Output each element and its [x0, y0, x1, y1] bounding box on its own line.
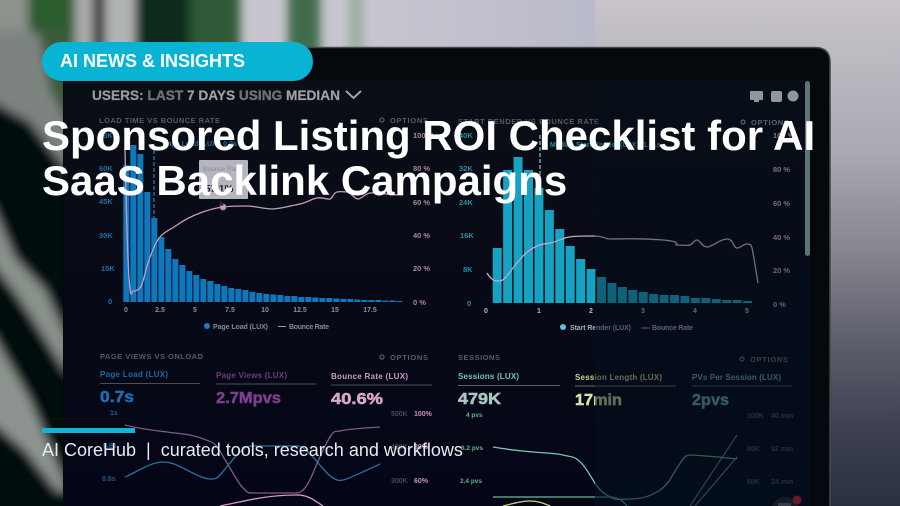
metric: sessions: 479K	[458, 391, 502, 408]
laptop body	[63, 48, 830, 506]
panel: page views vs onload	[100, 352, 433, 506]
line: sessions	[493, 447, 737, 500]
panel: sessions: SESSIONS	[458, 353, 500, 362]
chart: start render vs bounce rate: 80 %	[773, 165, 790, 174]
category pill	[42, 42, 313, 81]
line: page views	[125, 425, 380, 493]
bars	[123, 145, 402, 302]
chart: load time vs bounce rate: 60 %	[413, 198, 430, 207]
chart: load time vs bounce rate: 0	[124, 307, 128, 314]
metric: bounce rate: Bounce Rate (LUX)	[331, 372, 408, 381]
title: Sponsored Listing ROI Checklist for AI SaaS Backlink Campaigns	[42, 112, 815, 204]
metric: page load: 0.7s	[100, 389, 134, 406]
chart: start render vs bounce rate: 2	[589, 308, 593, 315]
panel: page views vs onload: 1s	[110, 410, 118, 417]
chart: start render vs bounce rate: 1	[537, 308, 541, 315]
tooltip: Bounce Rate	[203, 166, 241, 173]
metric: bounce rate: 40.6%	[331, 391, 383, 408]
bounce rate line	[125, 150, 403, 294]
chart: start render vs bounce rate: 0	[467, 299, 471, 308]
dashboard header: USERS: LAST 7 DAYS USING MEDIAN	[92, 87, 340, 103]
chart: start render vs bounce rate: 40K	[459, 131, 473, 140]
panel: sessions: 3.2 pvs	[461, 445, 483, 452]
chart: start render vs bounce rate: 16K	[460, 231, 474, 240]
metric: page load: Page Load (LUX)	[100, 370, 168, 379]
panel: sessions: 40 min	[771, 413, 793, 420]
legend: Bounce Rate	[652, 325, 693, 332]
line: session length	[503, 501, 550, 506]
chart: load time vs bounce rate: 60K	[99, 164, 113, 173]
metric: sessions: Sessions (LUX)	[458, 372, 519, 381]
chart: start render vs bounce rate: 20 %	[773, 266, 790, 275]
bounce rate line	[487, 236, 758, 283]
chart: start render vs bounce rate: START RENDER VS BOUNCE RATE	[458, 117, 599, 126]
chart: start render vs bounce rate: 32K	[459, 164, 473, 173]
chart: load time vs bounce rate: 2.5	[155, 307, 165, 314]
legend	[204, 323, 329, 331]
chart: load time vs bounce rate: 12.5	[293, 307, 307, 314]
chart: load time vs bounce rate: 0 %	[413, 298, 426, 307]
metric: bounce rate	[331, 372, 432, 408]
chart: load time vs bounce rate: 30K	[99, 231, 113, 240]
metric: pvs per session	[692, 373, 792, 409]
panel: sessions	[458, 353, 793, 506]
panel: page views vs onload: 300K	[391, 478, 408, 485]
panel: page views vs onload: PAGE VIEWS VS ONLOAD	[100, 352, 204, 361]
panel: sessions: 80K	[747, 446, 760, 453]
accent bar	[42, 428, 135, 433]
legend	[560, 324, 693, 332]
metric: page views: 2.7Mpvs	[216, 390, 281, 407]
chart: load time vs bounce rate: 17.5	[363, 307, 377, 314]
chat widget	[771, 496, 802, 506]
panel: sessions: 2.4 pvs	[460, 478, 482, 485]
footer credit: AI CoreHub | curated tools, research and workflows	[42, 440, 463, 460]
panel: sessions: OPTIONS	[750, 355, 788, 364]
panel: sessions: 60K	[747, 479, 760, 486]
panel: page views vs onload: 500K	[391, 411, 408, 418]
panel: page views vs onload: 400K	[391, 444, 408, 451]
chart: load time vs bounce rate: Page Load (LUX): 0.9s	[163, 141, 237, 148]
chart: load time vs bounce rate: 100 %	[413, 131, 435, 140]
chart: load time vs bounce rate: 20 %	[413, 264, 430, 273]
metric: sessions	[458, 372, 560, 408]
panel: sessions: 24 min	[771, 479, 793, 486]
header icons	[750, 90, 798, 102]
chart: start render vs bounce rate: 100 %	[773, 131, 795, 140]
chart: start render vs bounce rate: OPTIONS	[751, 118, 789, 127]
metric: page views: Page Views (LUX)	[216, 371, 287, 380]
chart: load time vs bounce rate: 0	[108, 297, 112, 306]
chart: load time vs bounce rate: 80 %	[413, 164, 430, 173]
line: bounce rate	[220, 495, 323, 506]
chart: load time vs bounce rate: 75K	[99, 131, 113, 140]
panel: sessions: 4 pvs	[466, 412, 483, 419]
chart: start render vs bounce rate: Median Start Render (LUX): 1.01s	[550, 142, 661, 149]
chart: load time vs bounce rate: 15	[331, 307, 339, 314]
panel: page views vs onload: 80%	[414, 444, 429, 451]
chart: load time vs bounce rate: OPTIONS	[390, 116, 428, 125]
metric: session length: Session Length (LUX)	[575, 373, 662, 382]
laptop rim	[63, 48, 830, 506]
chart: start render vs bounce rate: 3	[641, 308, 645, 315]
line: pvs per session	[493, 497, 627, 506]
legend: Page Load (LUX)	[213, 324, 268, 331]
chart: load time vs bounce rate: 40 %	[413, 231, 430, 240]
legend: Start Render (LUX)	[570, 325, 631, 332]
laptop screen	[64, 80, 810, 506]
bars	[493, 157, 752, 303]
chart: start render vs bounce rate: 60 %	[773, 199, 790, 208]
chart: load time vs bounce rate	[99, 116, 435, 331]
dashboard content	[92, 87, 795, 506]
chart: start render vs bounce rate: 8K	[463, 265, 473, 274]
chart: load time vs bounce rate: 5	[193, 307, 197, 314]
chart: start render vs bounce rate: 0 %	[773, 300, 786, 309]
metric: pvs per session: 2pvs	[692, 392, 729, 409]
dim overlay on right part of screen	[595, 80, 810, 506]
metric: page load	[100, 370, 200, 406]
metric: session length	[575, 373, 676, 409]
panel: page views vs onload: 0.8s	[103, 443, 117, 450]
chart: load time vs bounce rate: 10	[261, 307, 269, 314]
chart: start render vs bounce rate: 40 %	[773, 233, 790, 242]
legend: Bounce Rate	[289, 324, 329, 331]
chart: load time vs bounce rate: 15K	[101, 264, 115, 273]
metric: session length: 17min	[575, 392, 622, 409]
chart: load time vs bounce rate: LOAD TIME VS BOUNCE RATE	[99, 116, 220, 125]
chart: start render vs bounce rate: 4	[693, 308, 697, 315]
panel: sessions: 32 min	[771, 446, 793, 453]
panel: page views vs onload: 100%	[414, 411, 433, 418]
chart: load time vs bounce rate: 45K	[99, 197, 113, 206]
background plant leaves	[0, 0, 364, 506]
scrollbar	[805, 81, 810, 256]
metric: page views	[216, 371, 316, 407]
tooltip	[199, 160, 248, 210]
panel: page views vs onload: 0.6s	[102, 476, 116, 483]
chart: start render vs bounce rate: 5	[745, 308, 749, 315]
metric: pvs per session: PVs Per Session (LUX)	[692, 373, 781, 382]
pill label: AI NEWS & INSIGHTS	[60, 51, 245, 71]
line: page load	[125, 446, 380, 480]
chart: start render vs bounce rate: 0	[484, 308, 488, 315]
chart: load time vs bounce rate: 7.5	[225, 307, 235, 314]
panel: sessions: 100K	[747, 413, 764, 420]
tooltip: 57.1%	[205, 184, 233, 195]
panel: page views vs onload: OPTIONS	[390, 353, 428, 362]
chart: start render vs bounce rate: 24K	[459, 198, 473, 207]
panel: page views vs onload: 60%	[414, 478, 429, 485]
chart: start render vs bounce rate	[458, 117, 795, 332]
